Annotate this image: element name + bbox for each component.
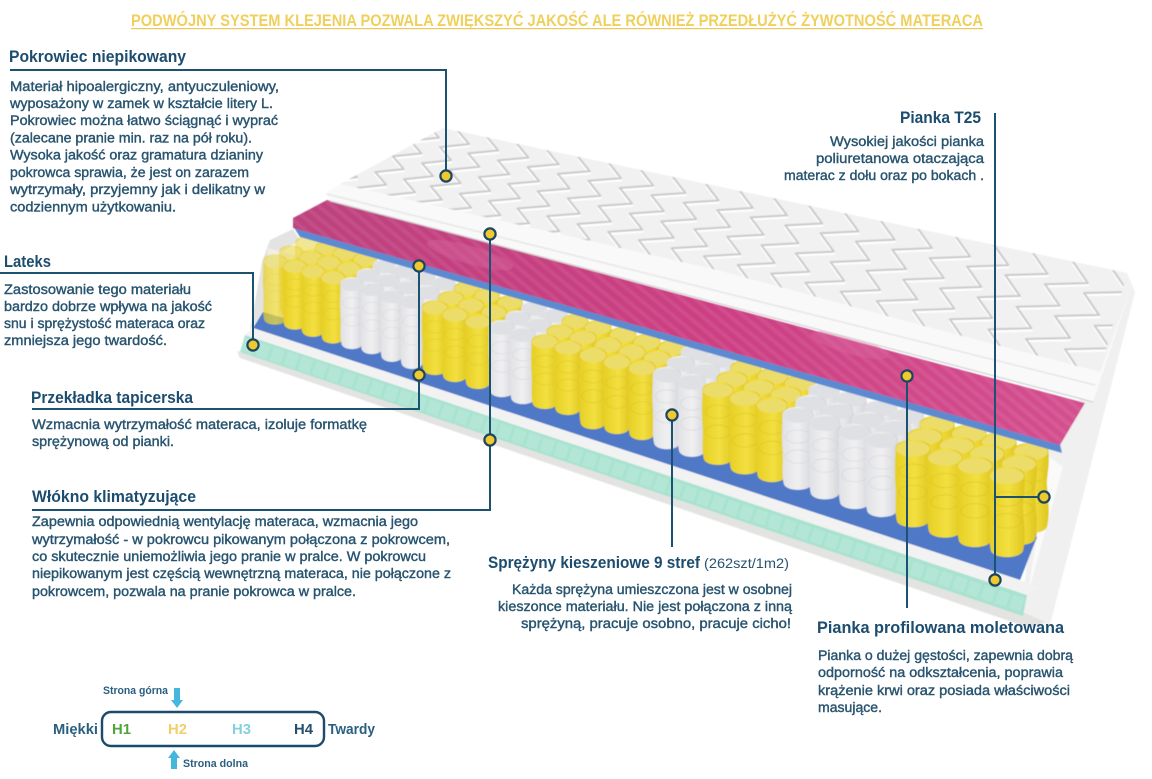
text block: materac z dołu oraz po bokach . bbox=[784, 168, 984, 184]
text block: zmniejsza jego twardość. bbox=[4, 333, 167, 349]
text block: wytrzymałość - w pokrowcu pikowanym połączona z pokrowcem, bbox=[31, 532, 450, 548]
text block: niepikowanym jest częścią wewnętrzną materaca, nie połączone z bbox=[32, 566, 451, 582]
panel: Pokrowiec niepikowany bbox=[9, 47, 452, 216]
mattress shell: inner right face bbox=[1027, 450, 1063, 597]
text block: sprężynową od pianki. bbox=[32, 434, 174, 450]
text block: Zastosowanie tego materiału bbox=[4, 282, 191, 298]
heading: Pianka profilowana moletowana bbox=[817, 618, 1065, 637]
text block: Wzmacnia wytrzymałość materaca, izoluje formatkę bbox=[32, 417, 367, 433]
text block: wytrzymały, przyjemny jak i delikatny w bbox=[9, 182, 266, 198]
text block: codziennym użytkowaniu. bbox=[10, 200, 176, 216]
scale box bbox=[102, 712, 324, 746]
text block: Zapewnia odpowiednią wentylację materaca, wzmacnia jego bbox=[32, 514, 418, 530]
soft label: Miękki bbox=[53, 722, 98, 738]
text block: wyposażony w zamek w kształcie litery L. bbox=[9, 96, 273, 112]
arrow: down to H2 bbox=[171, 688, 183, 708]
text block: sprężyną, pracuje osobno, pracuje cicho! bbox=[521, 616, 791, 632]
title: PODWÓJNY SYSTEM KLEJENIA POZWALA ZWIĘKSZYĆ JAKOŚĆ ALE RÓWNIEŻ PRZEDŁUŻYĆ ŻYWOTNOŚĆ MATERACA bbox=[131, 11, 983, 30]
pink profiled foam bbox=[293, 200, 1085, 445]
text block bbox=[9, 79, 279, 216]
leader line bbox=[666, 409, 678, 547]
text block: Pianka o dużej gęstości, zapewnia dobrą bbox=[818, 648, 1073, 664]
arrow: up to H2 bbox=[168, 750, 180, 769]
text block bbox=[818, 648, 1073, 716]
heading: Pokrowiec niepikowany bbox=[9, 47, 187, 66]
top side label: Strona górna bbox=[103, 685, 169, 697]
heading: Lateks bbox=[4, 252, 51, 271]
heading: Sprężyny kieszeniowe 9 stref bbox=[488, 553, 700, 572]
text block: (zalecane pranie min. raz na pół roku). bbox=[10, 130, 252, 146]
text block: masujące. bbox=[818, 700, 882, 716]
text block: Wysoka jakość oraz gramatura dzianiny bbox=[10, 148, 264, 164]
mattress shell: back left corner bbox=[250, 229, 300, 330]
bottom side label: Strona dolna bbox=[183, 758, 249, 770]
text block: snu i sprężystość materaca oraz bbox=[4, 316, 205, 332]
firmness scale legend bbox=[53, 685, 375, 770]
panel: Pianka profilowana moletowana bbox=[817, 370, 1073, 716]
leader line bbox=[10, 70, 452, 182]
climate fibre: mint layer bbox=[240, 335, 1027, 616]
blue strip under pink foam bbox=[293, 226, 1062, 453]
text block bbox=[498, 582, 792, 632]
hard label: Twardy bbox=[328, 722, 375, 738]
text block: Materiał hipoalergiczny, antyuczuleniowy, bbox=[10, 79, 279, 95]
spring cavity bbox=[263, 248, 1040, 537]
text block: Wysokiej jakości pianka bbox=[830, 134, 984, 150]
panel: Sprężyny kieszeniowe bbox=[488, 409, 792, 632]
grey base layer bbox=[237, 351, 1045, 628]
leader line bbox=[32, 260, 425, 409]
white spacer layer bbox=[245, 328, 1040, 595]
panel: Lateks bbox=[0, 252, 259, 351]
heading: Pianka T25 bbox=[900, 108, 981, 127]
text block: kieszonce materiału. Nie jest połączona z inną bbox=[498, 599, 792, 615]
leader line bbox=[32, 228, 496, 510]
leader line bbox=[901, 370, 913, 608]
H2: H2 bbox=[168, 722, 187, 738]
heading: Przekładka tapicerska bbox=[31, 388, 193, 407]
mattress shell: right side bbox=[1020, 273, 1135, 625]
panel: Pianka T25 bbox=[784, 108, 1050, 586]
leader line bbox=[989, 113, 1050, 586]
leader line bbox=[0, 273, 259, 351]
text block: poliuretanowa otaczająca bbox=[816, 151, 984, 167]
text block: pokrowca sprawia, że jest on zarazem bbox=[10, 165, 249, 181]
text block: krążenie krwi oraz posiada właściwości bbox=[818, 683, 1070, 699]
base foam: blue layer bbox=[253, 312, 1037, 580]
text block: pokrowcem, pozwala na pranie pokrowca w pralce. bbox=[32, 584, 356, 600]
text block bbox=[784, 134, 984, 184]
H1: H1 bbox=[112, 722, 131, 738]
text block: bardzo dobrze wpływa na jakość bbox=[4, 299, 212, 315]
H3: H3 bbox=[232, 722, 251, 738]
text block bbox=[4, 282, 212, 349]
text block: odporność na odkształcenia, poprawia bbox=[818, 665, 1063, 681]
text block: co skutecznie uniemożliwia jego pranie w pralce. W pokrowcu bbox=[32, 549, 426, 565]
quilted cover bbox=[326, 128, 1126, 402]
text block: Każda sprężyna umieszczona jest w osobnej bbox=[512, 582, 792, 598]
heading: (262szt/1m2) bbox=[704, 555, 789, 571]
pocket springs bbox=[263, 236, 1049, 557]
dark gap behind last springs bbox=[1018, 445, 1044, 540]
mattress illustration bbox=[237, 128, 1135, 628]
text block: Pokrowiec można łatwo ściągnąć i wyprać bbox=[10, 113, 278, 129]
text block bbox=[32, 417, 367, 450]
heading: Włókno klimatyzujące bbox=[32, 487, 196, 506]
H4: H4 bbox=[294, 722, 313, 738]
panel: Przekładka tapicerska bbox=[31, 260, 425, 450]
text block bbox=[31, 514, 451, 600]
panel: Włókno klimatyzujące bbox=[31, 228, 496, 600]
